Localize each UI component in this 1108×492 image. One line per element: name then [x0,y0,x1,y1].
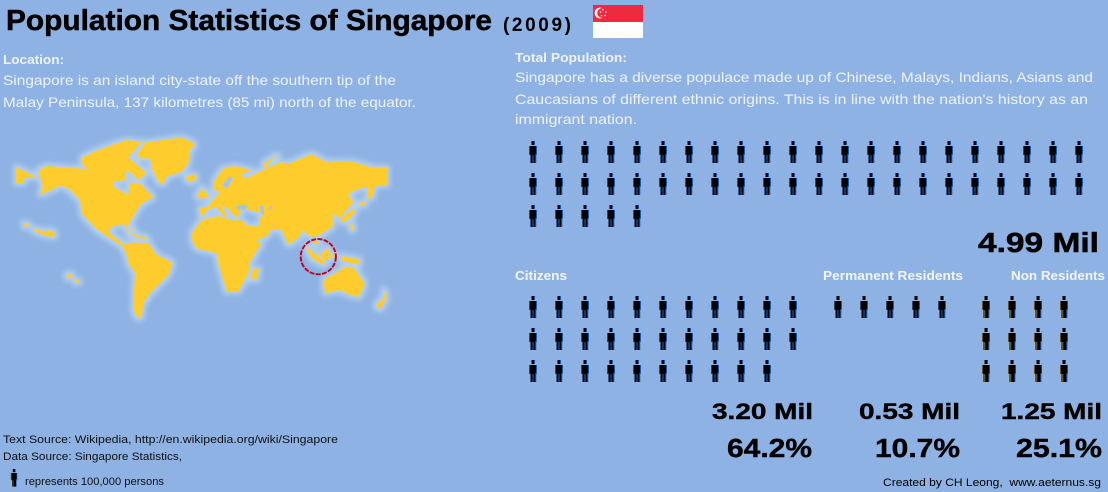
sources: Data Source: Singapore Statistics, [3,451,182,463]
stats: non residents: 1.25 Mil [1001,399,1102,424]
stats: citizens: 3.20 Mil [712,399,813,424]
world map [16,137,387,318]
heading: citizens: Citizens [515,269,567,283]
heading: non residents: Non Residents [1011,269,1105,283]
stats: non residents: 25.1% [1016,433,1102,463]
pictogram: citizens [529,296,797,382]
total population figure: 4.99 Mil [978,227,1099,258]
pictogram: permanent residents [834,296,946,318]
highlight circle: Singapore location [301,239,336,274]
title: Population Statistics of Singapore [6,5,492,37]
text block: total population: Singapore has a diverse populace made up of Chinese, Malays, Indians, Asians and [515,69,1093,85]
stats: permanent residents: 10.7% [875,433,960,463]
pictogram: non residents [982,296,1068,382]
icon: Singapore flag [593,5,643,38]
stats: citizens [712,399,813,463]
legend: represents 100,000 persons [25,476,165,488]
text block: location: Singapore is an island city-state off the southern tip of the [3,72,396,88]
stats: citizens: 64.2% [727,433,812,463]
stats: permanent residents [859,399,960,463]
text block: location: Malay Peninsula, 137 kilometres (85 mi) north of the equator. [3,94,416,110]
text block: location [3,53,416,110]
text block: total population: Caucasians of different ethnic origins. This is in line with the nation's history as an [515,91,1088,107]
sources: Text Source: Wikipedia, http://en.wikipedia.org/wiki/Singapore [3,434,338,446]
sources [3,434,338,463]
pictogram: total population [529,141,1083,227]
text block: total population: immigrant nation. [515,111,637,127]
map holes: inland seas [222,177,272,215]
stats: permanent residents: 0.53 Mil [859,399,960,424]
text block: location: Location: [3,53,64,67]
text block: total population: Total Population: [515,51,627,65]
text block: total population [515,51,1093,127]
title: (2009) [503,15,571,36]
credit: Created by CH Leong, www.aeternus.sg [883,477,1101,489]
heading: permanent residents: Permanent Residents [823,269,963,283]
stats: non residents [1001,399,1102,463]
legend [11,469,165,488]
